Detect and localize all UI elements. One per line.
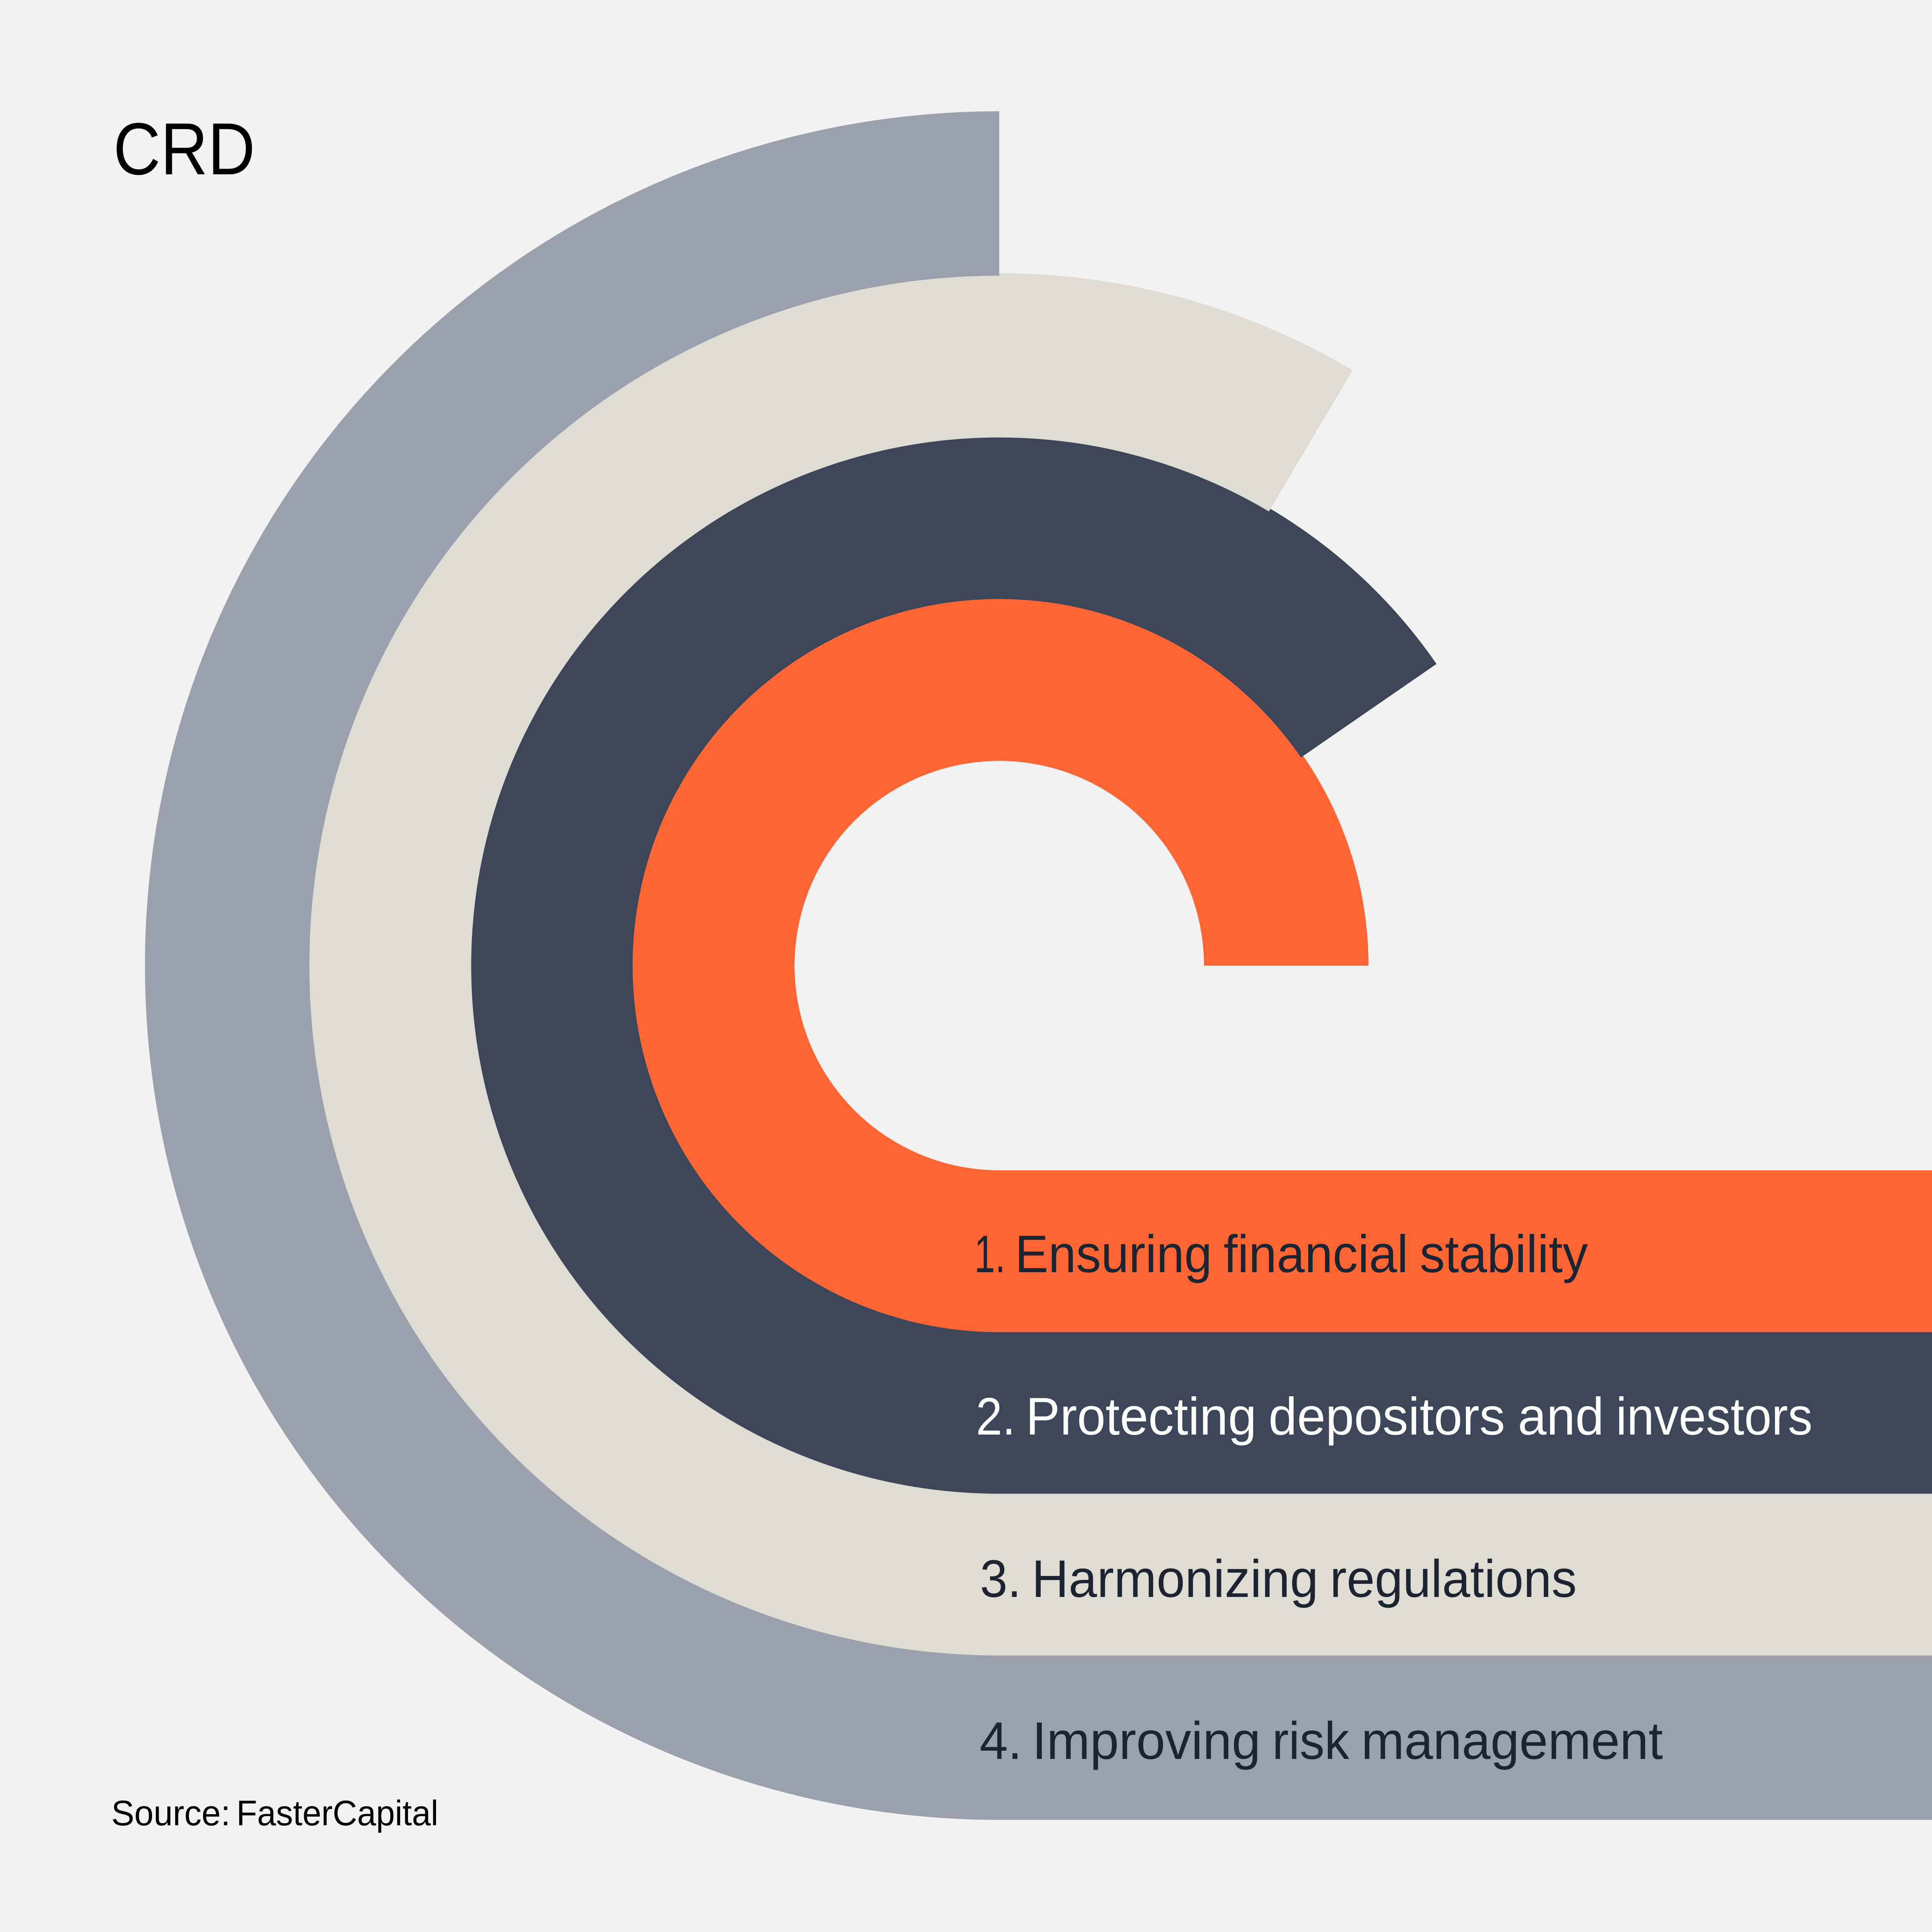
label 1: Ensuring [1015, 1225, 1212, 1284]
source note: Source: [111, 1794, 230, 1833]
label 3: Harmonizing [1032, 1550, 1318, 1608]
source note: FasterCapital [237, 1794, 438, 1833]
ring band 2: protecting depositors and investors (navy) [468, 434, 1932, 1497]
label 2: Protecting [1026, 1387, 1257, 1446]
ring band 1: ensuring financial stability (orange) [630, 596, 1932, 1335]
label 4 [980, 1712, 1663, 1770]
label 2: 2. [976, 1387, 1015, 1446]
label 2: depositors [1268, 1387, 1505, 1446]
label 2: investors [1616, 1387, 1812, 1446]
label 1: financial [1224, 1225, 1408, 1284]
ring band 3: harmonizing regulations (beige) [307, 273, 1932, 1658]
title: CRD [113, 108, 255, 190]
label 4: management [1361, 1712, 1663, 1770]
label 3: 3. [980, 1550, 1021, 1608]
label 3: regulations [1330, 1550, 1577, 1608]
label 1: stability [1420, 1225, 1588, 1284]
source note [111, 1794, 438, 1833]
label 4: 4. [980, 1712, 1022, 1770]
label 3 [980, 1550, 1577, 1608]
label 4: Improving [1032, 1712, 1261, 1770]
label 2: and [1518, 1387, 1604, 1446]
label 2 [976, 1387, 1812, 1446]
label 1: 1. [974, 1225, 1006, 1284]
label 1 [974, 1225, 1588, 1284]
label 4: risk [1272, 1712, 1350, 1770]
